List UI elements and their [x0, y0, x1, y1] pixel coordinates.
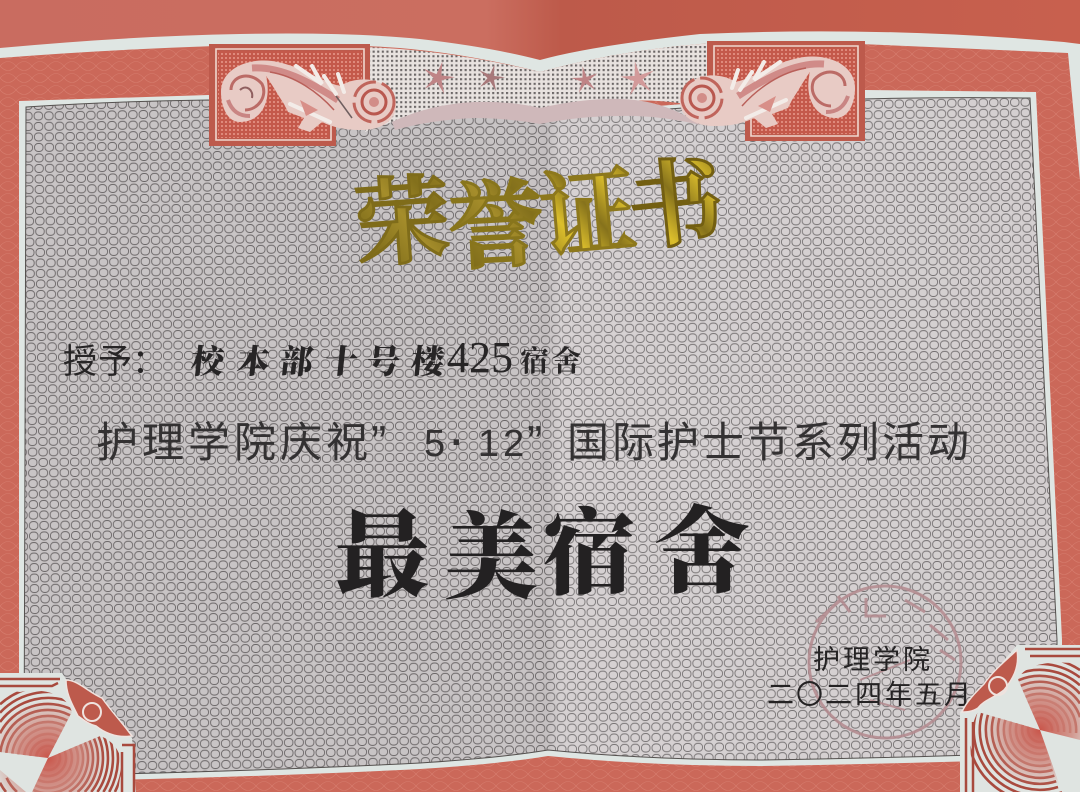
text: recipient line: 宿舍	[520, 339, 581, 380]
text: recipient line: 校本部十号楼	[189, 336, 451, 383]
ornament: top-left acanthus scroll	[221, 61, 396, 132]
text: issuer: 护理学院	[813, 645, 930, 675]
text: recipient line: 425	[447, 333, 513, 382]
text: recipient line: 授予	[63, 343, 132, 381]
text: award name: 舍	[655, 476, 749, 611]
text: issuer: 二〇二四年五月	[767, 680, 971, 710]
leaf ornament	[962, 650, 1018, 712]
title	[350, 125, 730, 288]
title: 誉	[445, 148, 546, 288]
text: event line: ·	[451, 422, 464, 464]
title: 荣	[350, 144, 454, 285]
icon: star 1	[419, 57, 458, 95]
icon: star 2	[475, 61, 507, 92]
text: event line	[96, 416, 969, 468]
wave ribbon	[392, 99, 700, 130]
text: event line: ”	[371, 416, 386, 468]
text: award name: 宿	[542, 478, 636, 613]
icon: star 4	[618, 58, 657, 96]
text: event line: 12	[478, 423, 524, 465]
title: 书	[621, 125, 730, 269]
leaf ornament	[66, 680, 132, 737]
ornament: top-left box	[209, 44, 370, 146]
text: event line: ”	[527, 416, 542, 468]
text: event line: 国际护士节系列活动	[567, 419, 969, 466]
text: issuer	[767, 645, 971, 710]
text: recipient line: ：	[132, 343, 166, 381]
corner: bottom-left fan	[0, 673, 136, 792]
ornament: top-right box	[707, 41, 865, 141]
text: event line: 护理学院庆祝	[96, 419, 368, 466]
text: award name: 最	[335, 480, 429, 615]
text: event line: 5	[424, 423, 445, 465]
icon: star 3	[569, 64, 600, 93]
text: award name: 美	[444, 482, 538, 617]
stamp	[809, 586, 961, 738]
ornament: top-right acanthus scroll	[680, 57, 855, 128]
title: 证	[535, 135, 640, 278]
text: award name	[335, 476, 749, 617]
top centre dotted strip with stars	[365, 43, 712, 132]
text: recipient line	[63, 333, 581, 383]
corner: bottom-right fan	[960, 645, 1080, 792]
